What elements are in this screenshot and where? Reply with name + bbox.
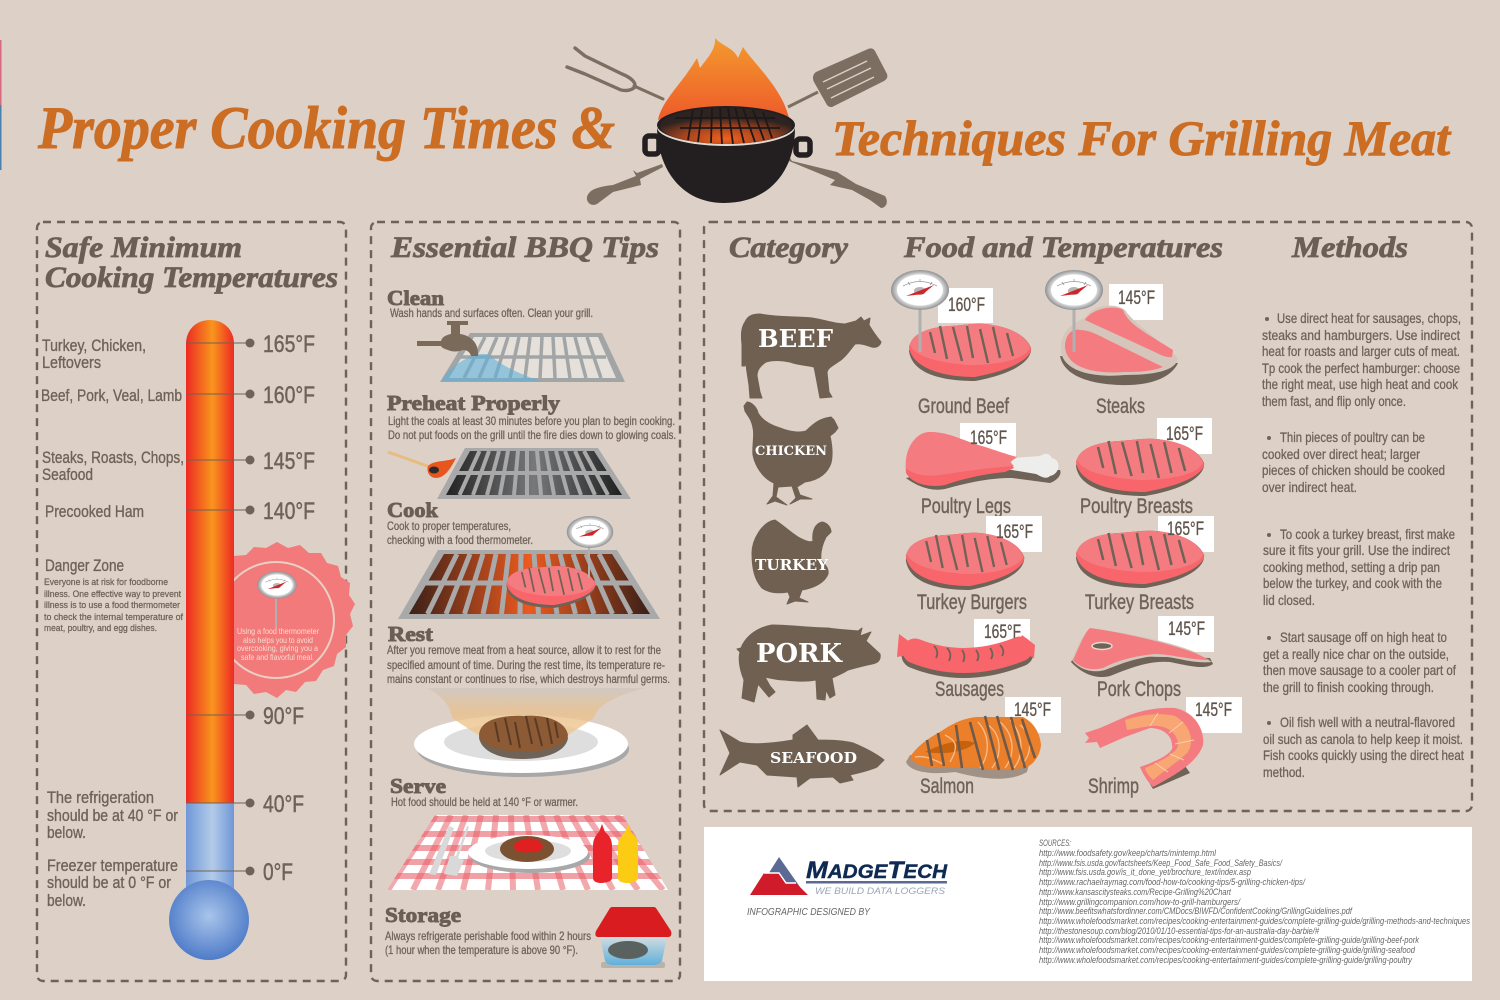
- tip: serve: [387, 778, 668, 890]
- food: poultry legs: 165°F: [970, 428, 1007, 449]
- temperature scale labels: 145°F: [263, 448, 315, 475]
- icon: storage container: [595, 907, 671, 968]
- title: first part: Proper Cooking Times &: [37, 95, 615, 161]
- text: danger zone: illness. One effective way to prevent: [44, 589, 181, 600]
- food: shrimp: 145°F: [1195, 700, 1232, 721]
- text: refrigeration note: should be at 40 °F or: [47, 806, 178, 825]
- food: pork chops: 145°F: [1168, 619, 1205, 640]
- method: seafood: Fish cooks quickly using the direct heat: [1263, 747, 1464, 763]
- heading: methods: Methods: [1291, 231, 1408, 264]
- text: danger zone: to check the internal temperature of: [44, 612, 183, 623]
- badge text: [237, 626, 319, 662]
- category: turkey: TURKEY: [755, 556, 828, 574]
- method: seafood: method.: [1263, 764, 1305, 780]
- tip: cook: [387, 498, 660, 619]
- food: turkey burgers: Turkey Burgers: [917, 591, 1027, 614]
- logo: madgetech: [750, 857, 948, 896]
- food: shrimp: [1085, 697, 1242, 798]
- food: salmon: [906, 697, 1061, 798]
- text: sources: http://www.grillingcompanion.com/how-to-grill-hamburgers/: [1039, 897, 1241, 907]
- icon: grill with crossed tools and flame: [567, 38, 887, 208]
- food: ground beef: 160°F: [948, 295, 985, 316]
- text: sources: http://www.fsis.usda.gov/factsheets/Keep_Food_Safe_Food_Safety_Basics/: [1039, 858, 1283, 868]
- method: pork: [1263, 629, 1456, 695]
- panel: essential bbq tips: [371, 222, 688, 981]
- text: danger zone: illness is to use a food thermometer: [44, 600, 180, 611]
- method: beef: Use direct heat for sausages, chops,: [1277, 310, 1461, 326]
- text: temperature food labels: Turkey, Chicken,: [42, 336, 146, 355]
- method: seafood: oil such as canola to help keep it moist.: [1263, 731, 1463, 747]
- food: poultry breasts: Poultry Breasts: [1080, 495, 1193, 518]
- panel: footer with logo and sources: [704, 827, 1472, 981]
- category: chicken: CHICKEN: [755, 444, 827, 459]
- food: sausages: Sausages: [935, 678, 1004, 701]
- icon: lower right handle: [789, 158, 887, 208]
- tip: storage: [385, 903, 671, 968]
- text: designed by: INFOGRAPHIC DESIGNED BY: [747, 907, 871, 918]
- text: danger zone: Danger Zone: [45, 556, 124, 575]
- text: danger zone: Everyone is at risk for foodborne: [44, 577, 168, 588]
- icon: pot handles: [645, 136, 810, 155]
- chart: thermometer: [169, 320, 315, 960]
- method: chicken: over indirect heat.: [1262, 479, 1357, 495]
- food: poultry legs: [906, 423, 1061, 518]
- text: freezer note: [47, 856, 178, 910]
- method: beef: the right meat, use high heat and cook: [1262, 376, 1459, 392]
- badge text: overcooking, giving you a: [237, 643, 318, 653]
- food: ground beef: Ground Beef: [918, 395, 1009, 418]
- method: beef: [1262, 310, 1461, 409]
- method: beef: heat for roasts and larger cuts of meat.: [1262, 343, 1460, 359]
- tip: rest: mains constant or continues to rise, which destroys harmful germs.: [387, 672, 670, 686]
- badge text: also helps you to avoid: [243, 635, 313, 645]
- temperature scale labels: 90°F: [263, 703, 304, 730]
- food: turkey burgers: [906, 516, 1042, 614]
- category: pork: PORK: [756, 639, 843, 669]
- tip: clean: Clean: [387, 286, 444, 310]
- left edge colour strip: [0, 40, 2, 170]
- tip: storage: (1 hour when the temperature is above 90 °F).: [385, 943, 578, 957]
- icon: thermometer: [567, 516, 613, 578]
- method: turkey: lid closed.: [1263, 592, 1315, 608]
- method: chicken: [1262, 429, 1445, 495]
- text: sources: http://www.wholefoodsmarket.com/recipes/cooking-entertainment-guides/complete-grilling-guide/grilling-seafood: [1039, 945, 1416, 955]
- method: seafood: [1263, 714, 1464, 780]
- title: second part: Techniques For Grilling Meat: [832, 110, 1452, 166]
- temperature scale labels: [263, 331, 315, 886]
- tip: preheat properly: [387, 391, 676, 499]
- icon: clean grill: [440, 333, 625, 382]
- tip: rest: [387, 622, 670, 777]
- method: turkey: cooking method, setting a drip pan: [1263, 559, 1440, 575]
- text: refrigeration note: The refrigeration: [47, 788, 154, 807]
- icon: picnic table setting: [380, 815, 688, 890]
- method: seafood: Oil fish well with a neutral-flavored: [1280, 714, 1455, 730]
- text: refrigeration note: below.: [47, 823, 86, 842]
- icon: coal grill: [437, 448, 631, 499]
- text: sources: http://www.beefitswhatsfordinner.com/CMDocs/BIWFD/ConfidentCooking/GrillingGuidelines.pdf: [1039, 906, 1353, 916]
- method: chicken: pieces of chicken should be cooked: [1262, 462, 1445, 478]
- logo: madgetech: WE BUILD DATA LOGGERS: [815, 886, 945, 896]
- method: pork: Start sausage off on high heat to: [1280, 629, 1447, 645]
- icon: knife and fork: [429, 826, 469, 876]
- text: danger zone: [44, 556, 183, 634]
- food: turkey breasts: 165°F: [1167, 519, 1204, 540]
- food: steaks: 145°F: [1118, 288, 1155, 309]
- method: turkey: To cook a turkey breast, first make: [1280, 526, 1455, 542]
- method: chicken: cooked over direct heat; larger: [1262, 446, 1420, 462]
- food: ground beef: [891, 270, 1031, 418]
- food: steaks: Steaks: [1096, 395, 1145, 418]
- food: steaks: [1045, 270, 1178, 418]
- method: pork: the grill to finish cooking through.: [1263, 679, 1434, 695]
- category: turkey: [752, 520, 831, 604]
- category: chicken: [744, 402, 838, 505]
- category: beef: [741, 314, 881, 398]
- text: refrigeration note: [47, 788, 178, 842]
- tip: cook: checking with a food thermometer.: [387, 533, 533, 547]
- food: turkey burgers: 165°F: [996, 522, 1033, 543]
- icon: match: [388, 452, 456, 478]
- icon: lower left handle: [587, 164, 663, 205]
- text: sources: http://www.kansascitysteaks.com/Recipe-Grilling%20Chart: [1039, 887, 1231, 897]
- text: sources: http://www.rachaelraymag.com/food-how-to/cooking-tips/5-grilling-chicken-tips/: [1039, 877, 1306, 887]
- icon: plate with steak and ketchup: [468, 835, 590, 873]
- text: sources: http://www.wholefoodsmarket.com/recipes/cooking-entertainment-guides/complete-grilling-guide/grilling-poultry: [1039, 955, 1412, 965]
- food: sausages: 165°F: [984, 622, 1021, 643]
- tip: preheat properly: Do not put foods on the grill until the fire dies down to glowing coals.: [388, 428, 676, 442]
- method: pork: then move sausage to a cooler part of: [1263, 662, 1456, 678]
- food: pork chops: Pork Chops: [1097, 678, 1181, 701]
- food: turkey breasts: [1076, 516, 1214, 614]
- text: sources: [1039, 838, 1470, 965]
- food: poultry legs: Poultry Legs: [921, 495, 1011, 518]
- tip: rest: specified amount of time. During the rest time, its temperature re-: [387, 658, 665, 672]
- tip: rest: After you remove meat from a heat source, allow it to rest for the: [387, 643, 661, 657]
- method: turkey: [1263, 526, 1455, 608]
- icon: flame: [658, 38, 789, 120]
- category: pork: [737, 625, 880, 702]
- icon: mustard bottle: [618, 824, 638, 883]
- food: salmon: Salmon: [920, 775, 974, 798]
- food: shrimp: Shrimp: [1088, 775, 1139, 798]
- temperature scale labels: 165°F: [263, 331, 315, 358]
- method: beef: them fast, and flip only once.: [1262, 393, 1406, 409]
- food: sausages: [897, 619, 1035, 701]
- tip: preheat properly: Light the coals at least 30 minutes before you plan to begin cooking.: [388, 414, 675, 428]
- heading: food and temperatures: Food and Temperatures: [903, 231, 1223, 264]
- category: seafood: SEAFOOD: [770, 749, 857, 767]
- temperature scale labels: 40°F: [263, 791, 304, 818]
- text: sources: SOURCES:: [1039, 838, 1071, 848]
- tip: serve: Hot food should be held at 140 °F or warmer.: [391, 795, 578, 809]
- panel: safe minimum cooking temperatures: [37, 222, 355, 981]
- icon: pot body: [657, 128, 795, 203]
- tip: clean: Wash hands and surfaces often. Clean your grill.: [390, 306, 593, 320]
- temperature scale labels: 140°F: [263, 498, 315, 525]
- method: beef: Tp cook the perfect hamburger: choose: [1262, 360, 1460, 376]
- category: seafood: [720, 725, 884, 787]
- text: temperature food labels: Leftovers: [42, 353, 101, 372]
- badge text: safe and flavorful meal.: [241, 652, 314, 662]
- heading: category: Category: [729, 231, 849, 264]
- text: temperature food labels: Precooked Ham: [45, 502, 144, 521]
- icon: fork: [567, 48, 663, 99]
- tip: cook: Cook to proper temperatures,: [387, 519, 511, 533]
- heading: safe minimum: Safe Minimum: [45, 231, 242, 264]
- text: temperature food labels: Beef, Pork, Veal, Lamb: [41, 386, 182, 405]
- food: poultry breasts: 165°F: [1166, 424, 1203, 445]
- text: sources: http://www.fsis.usda.gov/is_it_done_yet/brochure_text/index.asp: [1039, 867, 1251, 877]
- tip: clean: [387, 286, 625, 382]
- text: temperature food labels: Seafood: [42, 465, 93, 484]
- temperature scale labels: 0°F: [263, 859, 293, 886]
- icon: faucet: [417, 321, 478, 356]
- icon: spatula: [788, 48, 887, 107]
- category: beef: BEEF: [758, 324, 833, 353]
- text: freezer note: Freezer temperature: [47, 856, 178, 875]
- text: temperature food labels: [41, 336, 184, 521]
- icon: hot grill with patty: [398, 550, 660, 619]
- icon: plate with resting steak: [414, 688, 645, 777]
- logo: madgetech: MADGETECH: [806, 857, 948, 884]
- text: sources: http://www.foodsafety.gov/keep/charts/mintemp.html: [1039, 848, 1217, 858]
- text: sources: http://www.wholefoodsmarket.com/recipes/cooking-entertainment-guides/complete-grilling-guide/grilling-beef-pork: [1039, 935, 1419, 945]
- icon: thermometer: [257, 571, 297, 628]
- food: poultry breasts: [1076, 418, 1212, 518]
- badge: thermometer tip: [199, 542, 355, 698]
- food: salmon: 145°F: [1014, 700, 1051, 721]
- food: turkey breasts: Turkey Breasts: [1085, 591, 1194, 614]
- tip: storage: Storage: [385, 903, 461, 927]
- food: pork chops: [1071, 616, 1214, 701]
- heading: essential bbq tips: Essential BBQ Tips: [390, 231, 659, 264]
- text: danger zone: meat, poultry, and egg dishes.: [44, 623, 157, 634]
- methods: text blocks: [1262, 310, 1464, 780]
- text: freezer note: below.: [47, 891, 86, 910]
- tip: preheat properly: Preheat Properly: [387, 391, 561, 415]
- method: turkey: sure it fits your grill. Use the indirect: [1263, 542, 1450, 558]
- icon: ketchup bottle: [593, 824, 612, 883]
- text: sources: http://thestonesoup.com/blog/2010/01/10-essential-tips-for-an-australia-day-barbie/#: [1039, 926, 1320, 936]
- method: turkey: below the turkey, and cook with the: [1263, 575, 1442, 591]
- badge text: Using a food thermometer: [237, 626, 319, 636]
- tip: rest: Rest: [388, 622, 433, 646]
- panel: category, food and temperatures, methods: [704, 222, 1472, 811]
- tip: serve: Serve: [390, 774, 446, 798]
- text: freezer note: should be at 0 °F or: [47, 873, 171, 892]
- text: temperature food labels: Steaks, Roasts, Chops,: [42, 448, 184, 467]
- heading: cooking temperatures: Cooking Temperatures: [45, 261, 338, 294]
- tip: storage: Always refrigerate perishable food within 2 hours: [385, 929, 591, 943]
- temperature scale labels: 160°F: [263, 382, 315, 409]
- method: pork: get a really nice char on the outside,: [1263, 646, 1449, 662]
- method: chicken: Thin pieces of poultry can be: [1280, 429, 1425, 445]
- method: beef: steaks and hamburgers. Use indirect: [1262, 327, 1460, 343]
- tip: cook: Cook: [387, 498, 438, 522]
- icon: cooking grate: [675, 107, 780, 144]
